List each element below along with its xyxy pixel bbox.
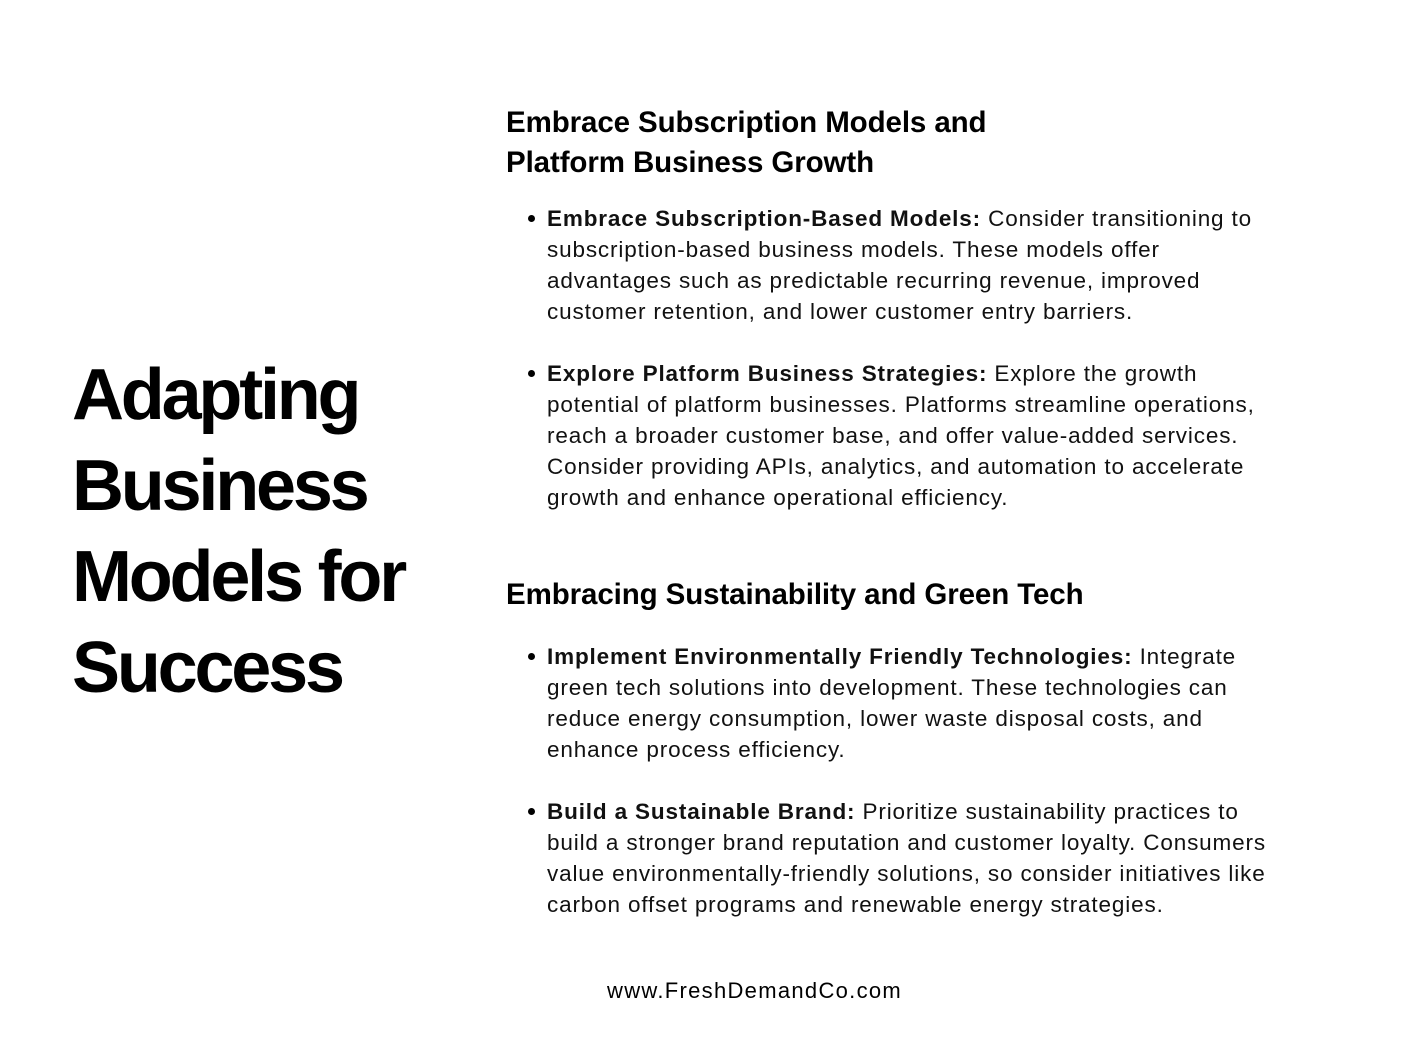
- bullet: subscription models: subscription-based business models. These models offer: [547, 237, 1160, 262]
- footer url: www.FreshDemandCo.com: [607, 978, 902, 1003]
- title: Success: [72, 628, 342, 708]
- bullet: sustainable brand: [547, 796, 1266, 920]
- title: Adapting: [72, 355, 358, 435]
- bullet: green tech: green tech solutions into development. These technologies can: [547, 675, 1228, 700]
- heading: subscription: Embrace Subscription Models and: [506, 106, 986, 139]
- title: [72, 355, 406, 708]
- bullet: green tech: [547, 641, 1236, 765]
- bullet: platform strategies: [547, 358, 1255, 513]
- bullet: sustainable brand: value environmentally-friendly solutions, so consider initiatives like: [547, 861, 1266, 886]
- bullet: subscription models: advantages such as predictable recurring revenue, improved: [547, 268, 1200, 293]
- bullet: green tech: Implement Environmentally Friendly Technologies: Integrate: [547, 644, 1236, 669]
- heading: sustainability: Embracing Sustainability and Green Tech: [506, 578, 1084, 611]
- title: Models for: [72, 537, 404, 617]
- bullet: platform strategies: growth and enhance operational efficiency.: [547, 485, 1008, 510]
- bullet: platform strategies: reach a broader customer base, and offer value-added services.: [547, 423, 1238, 448]
- bullet: sustainable brand: build a stronger brand reputation and customer loyalty. Consumers: [547, 830, 1266, 855]
- bullet: platform strategies: Consider providing APIs, analytics, and automation to accelerate: [547, 454, 1244, 479]
- title: Business: [72, 446, 367, 526]
- bullet: platform strategies: potential of platform businesses. Platforms streamline operations,: [547, 392, 1255, 417]
- bullet: subscription models: customer retention, and lower customer entry barriers.: [547, 299, 1133, 324]
- heading: subscription: [506, 106, 986, 179]
- bullet: subscription models: [547, 203, 1252, 327]
- bullet: subscription models: Embrace Subscription-Based Models: Consider transitioning to: [547, 206, 1252, 231]
- bullet: green tech: enhance process efficiency.: [547, 737, 846, 762]
- bullet: platform strategies: Explore Platform Business Strategies: Explore the growth: [547, 361, 1197, 386]
- heading: subscription: Platform Business Growth: [506, 146, 874, 179]
- bullet: sustainable brand: Build a Sustainable Brand: Prioritize sustainability practices to: [547, 799, 1239, 824]
- bullet: green tech: reduce energy consumption, lower waste disposal costs, and: [547, 706, 1203, 731]
- bullet: sustainable brand: carbon offset programs and renewable energy strategies.: [547, 892, 1164, 917]
